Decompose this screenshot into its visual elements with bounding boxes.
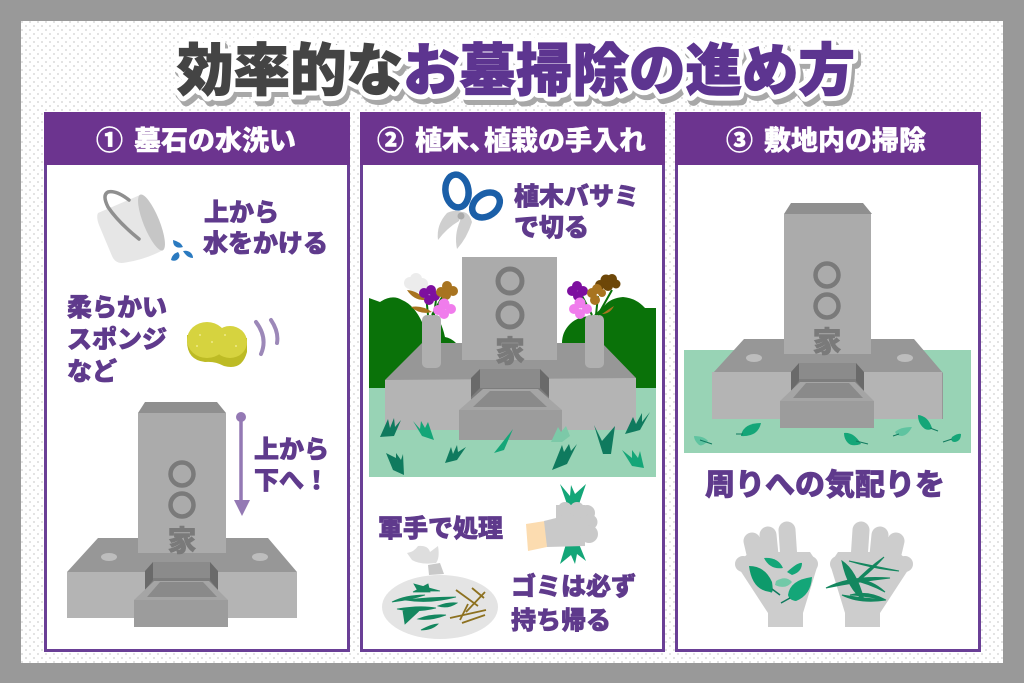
text: pour water from above: 上から bbox=[204, 199, 279, 227]
illustration: gravestone 2 bbox=[385, 257, 636, 440]
illustration: gravestone 3: 家 bbox=[812, 326, 842, 359]
icon: bucket bbox=[97, 192, 193, 263]
step 2 heading bbox=[360, 112, 665, 165]
step 1 heading: ① bbox=[96, 126, 123, 156]
step 1 heading: 墓石の水洗い bbox=[134, 126, 296, 156]
text: soft sponge: 柔らかい bbox=[67, 294, 167, 322]
vase right with flowers bbox=[567, 274, 620, 368]
arrow: top to bottom bbox=[234, 412, 250, 516]
text: from top to bottom: 上から bbox=[254, 436, 329, 464]
text: cut with shears: で切る bbox=[514, 214, 589, 242]
icon: trash bag bbox=[382, 546, 498, 639]
step 1 heading bbox=[44, 112, 350, 165]
step 3 heading bbox=[675, 112, 981, 165]
text: cut with shears: 植木バサミ bbox=[514, 183, 639, 211]
text: always take trash home bbox=[511, 572, 636, 635]
text: pour water from above: 水をかける bbox=[203, 230, 328, 258]
icon: gloved hand holding weeds bbox=[526, 484, 598, 564]
text: always take trash home: ゴミは必ず bbox=[511, 572, 636, 601]
step 2 heading: 植栽の手入れ bbox=[484, 126, 646, 156]
title: 効率的なお墓掃除の進め方 bbox=[177, 39, 855, 102]
text: be considerate of surroundings: 周りへの気配りを bbox=[705, 469, 945, 502]
title: 効率的なお墓掃除の進め方 bbox=[180, 44, 858, 107]
text: soft sponge: など bbox=[67, 358, 117, 386]
panel: step 3 site cleaning bbox=[675, 112, 981, 650]
text: handle with work gloves: 軍手で処理 bbox=[378, 515, 503, 543]
title: 効率的なお墓掃除の進め方 bbox=[177, 39, 855, 102]
text: from top to bottom: 下へ！ bbox=[254, 467, 329, 495]
illustration: gravestone 1: 家 bbox=[167, 525, 197, 558]
fallen leaves bbox=[694, 415, 961, 445]
grass tufts bbox=[380, 412, 650, 475]
icon: garden scissors bbox=[438, 173, 505, 249]
icon: sponge bbox=[187, 320, 277, 367]
text: pour water from above bbox=[203, 199, 328, 258]
text: from top to bottom bbox=[254, 436, 329, 495]
text: soft sponge: スポンジ bbox=[67, 326, 167, 354]
step 3 heading: ③ bbox=[726, 126, 753, 156]
hedge right bbox=[562, 297, 656, 388]
step 2 heading: ② bbox=[377, 126, 404, 156]
illustration: gravestone 2: 家 bbox=[495, 336, 525, 369]
illustration: gravestone 1 bbox=[67, 402, 297, 627]
icon: right glove with grass bbox=[826, 530, 913, 627]
icon: left glove with leaves bbox=[735, 530, 818, 627]
step 2 heading: 、 bbox=[469, 126, 496, 156]
panel: step 2 trees and plants bbox=[360, 112, 665, 650]
ground bbox=[684, 350, 971, 453]
text: cut with shears bbox=[514, 183, 639, 242]
vase left with flowers bbox=[404, 273, 458, 368]
text: always take trash home: 持ち帰る bbox=[511, 607, 611, 635]
step 2 heading: 植木 bbox=[415, 126, 469, 156]
ground bbox=[369, 388, 656, 477]
hedge left bbox=[369, 297, 456, 388]
text: soft sponge bbox=[67, 294, 167, 386]
illustration: gravestone 3 bbox=[712, 203, 943, 428]
step 3 heading: 敷地内の掃除 bbox=[764, 125, 926, 156]
panel: step 1 water wash bbox=[44, 112, 350, 650]
